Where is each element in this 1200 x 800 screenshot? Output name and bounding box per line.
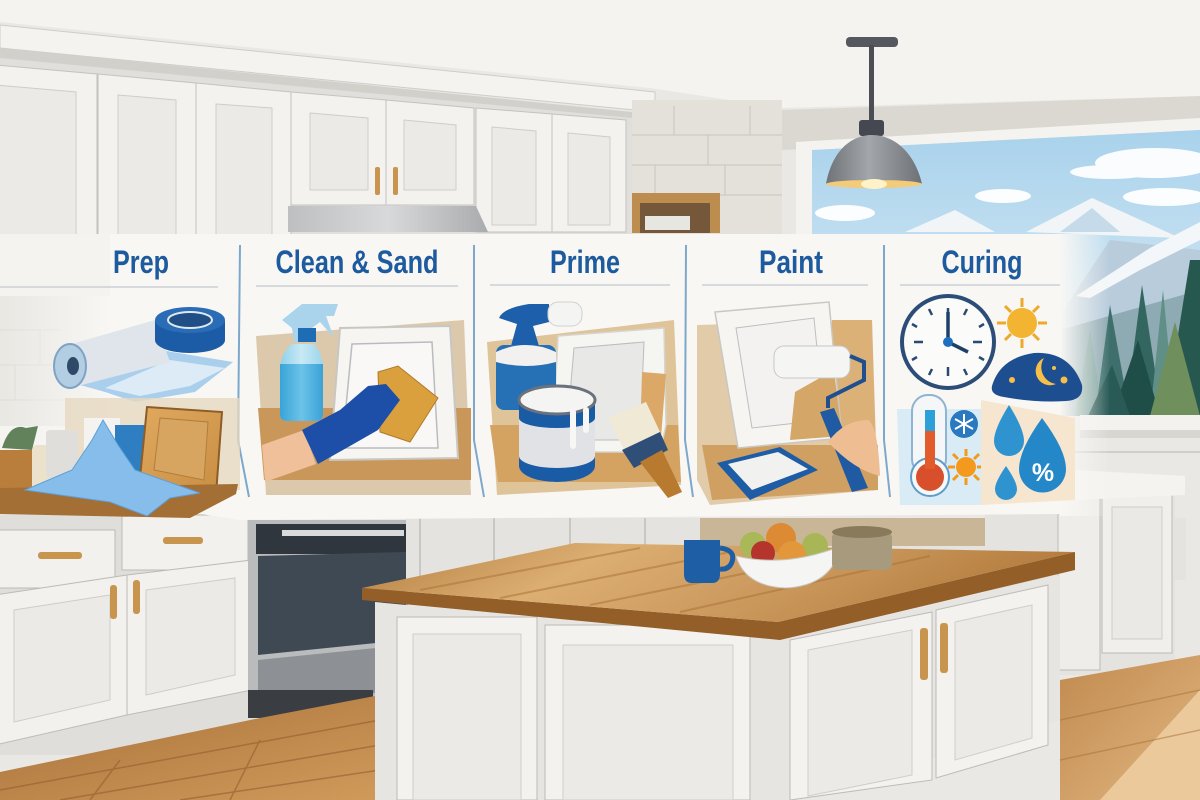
panel tint and water drops (981, 400, 1075, 505)
icon: paint roller (774, 346, 868, 492)
heading: Prep: Prep (113, 244, 169, 280)
back run of cabinets (406, 470, 1186, 675)
icon: gloved hand with sponge (262, 366, 438, 482)
icon: primer bottle (496, 302, 582, 410)
icon: cabinet door (330, 326, 458, 460)
wood floor (0, 655, 1200, 800)
lower counter and cabinets left (0, 515, 255, 755)
icon: sun (997, 298, 1047, 348)
icon: snowflake (950, 410, 978, 438)
upper cabinets (0, 25, 655, 240)
icon: thermometer (911, 395, 949, 496)
heading: Clean & Sand: Clean & Sand (276, 244, 438, 280)
panel: Clean & Sand (256, 244, 471, 495)
panel: Prime (487, 244, 682, 498)
heading: Curing: Curing (942, 244, 1022, 280)
heading: Prime: Prime (550, 244, 620, 280)
panel tint and water drops: % (1032, 459, 1054, 487)
stove (248, 520, 408, 718)
tint behind thermometer (897, 409, 982, 505)
icon: paint brush (608, 402, 682, 498)
icon: moon and stars cloud (992, 353, 1082, 402)
icon: paint tray (717, 447, 818, 500)
panel: Paint (697, 244, 880, 505)
icon: hand (828, 420, 880, 476)
heading: Paint: Paint (759, 244, 823, 280)
panel: band of steps background (0, 234, 1110, 520)
wood backdrop (487, 320, 681, 495)
counter under prep (0, 484, 238, 518)
window with mountains (782, 96, 1200, 470)
panel: Curing (897, 244, 1082, 505)
icon: cabinet door (715, 302, 842, 448)
icon: spray bottle (280, 304, 338, 421)
icon: clock (902, 296, 994, 388)
icon: blue painter's tape (155, 307, 225, 353)
pendant lamp (826, 37, 922, 189)
mug, fruit bowl and canister (684, 523, 892, 588)
icon: wood door sample and jars (0, 398, 240, 495)
icon: cabinet door (552, 328, 666, 452)
icon: plastic sheeting roll (54, 320, 233, 402)
icon: paint can (519, 386, 595, 482)
icon: hot sun small (948, 449, 984, 485)
icon: blue drop cloth (25, 420, 200, 516)
panel: Prep (0, 244, 240, 518)
wood backdrop (256, 320, 471, 495)
kitchen island (362, 543, 1075, 800)
backsplash and shelf (632, 100, 782, 235)
wood backdrop (697, 320, 876, 505)
